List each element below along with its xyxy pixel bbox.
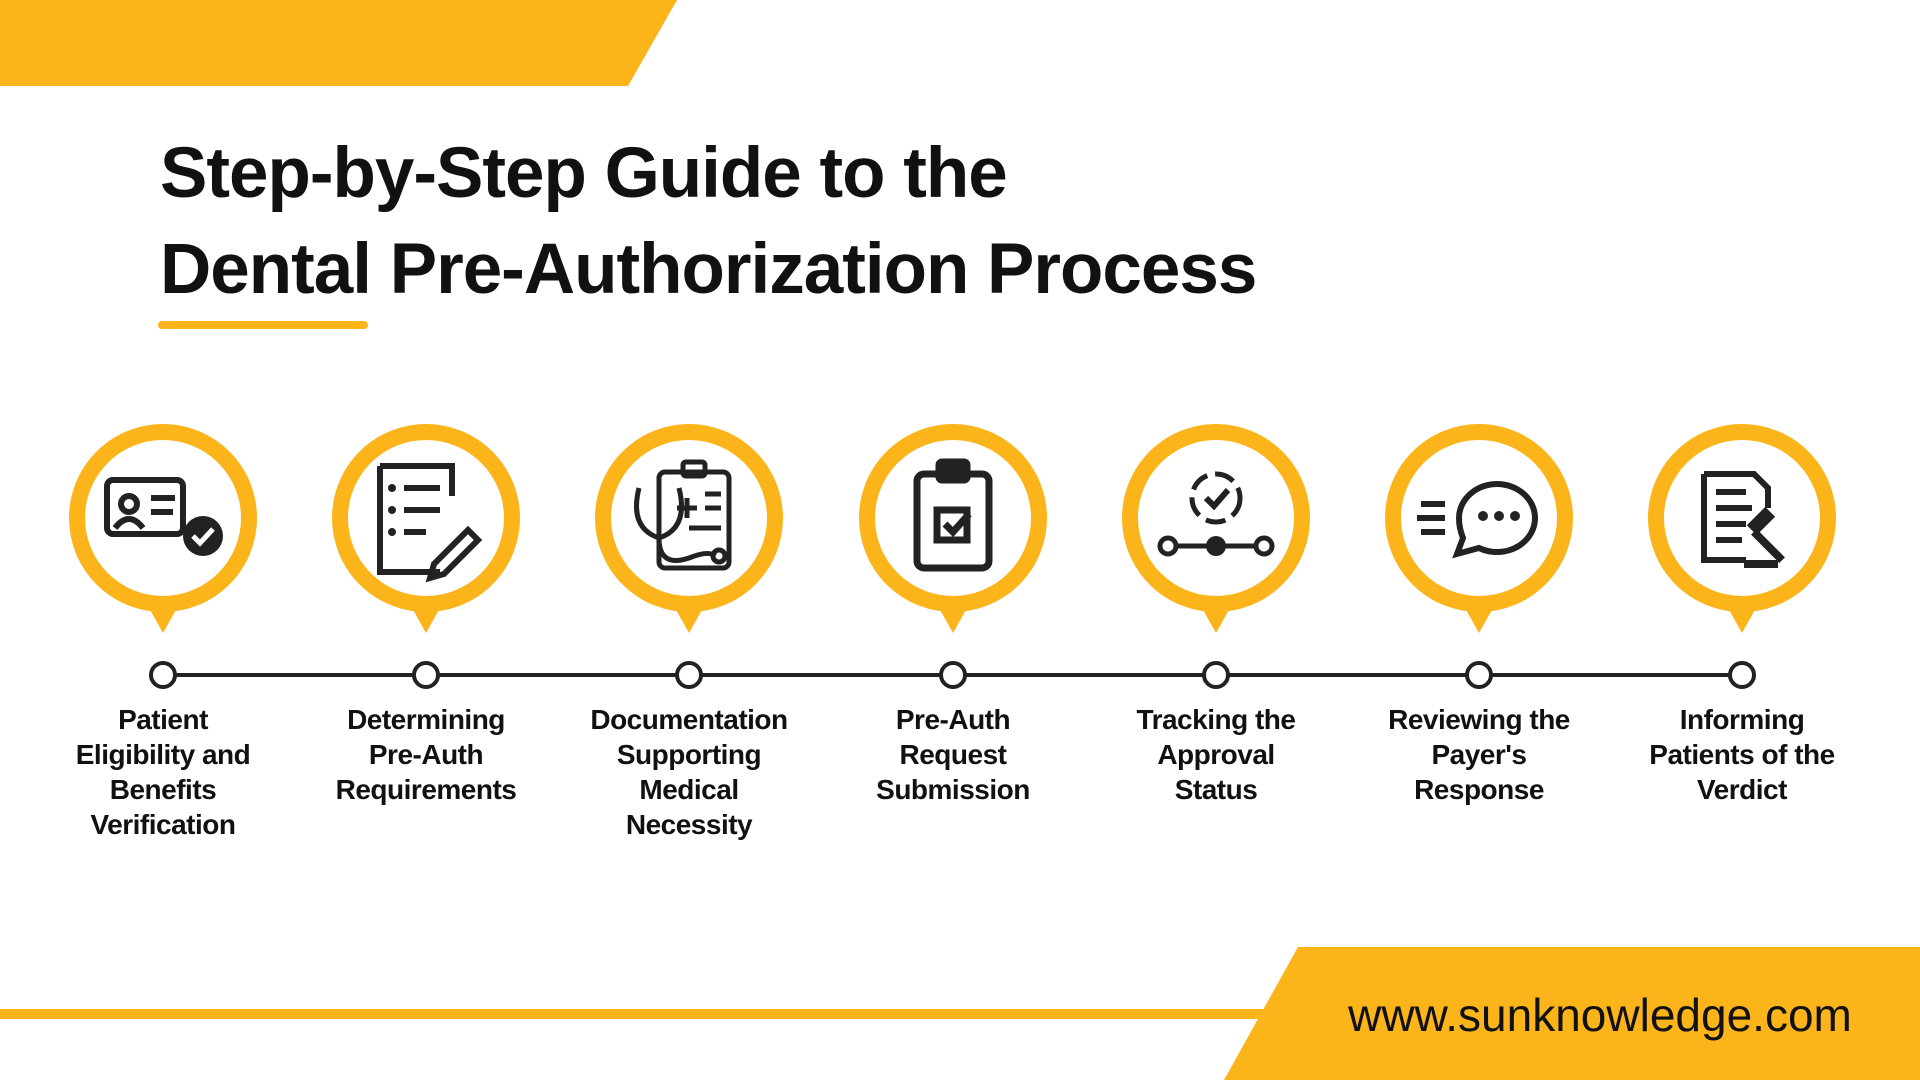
label: step 2: Determining [347,704,505,735]
label: step 3: Medical [639,774,739,805]
icon: medical clipboard with stethoscope [603,432,775,633]
top banner [0,0,677,86]
title underline [158,321,368,329]
icon: tracking status [1130,432,1302,633]
label: step 3 [590,704,788,840]
label: step 7 [1649,704,1835,805]
label: step 5: Status [1175,774,1257,805]
label: step 1: Eligibility and [76,739,250,770]
label: step 6 [1388,704,1570,805]
icon: ID card [77,432,249,633]
label: step 7: Patients of the [1649,739,1835,770]
label: step 1: Patient [118,704,208,735]
label: step 6: Reviewing the [1388,704,1570,735]
label: step 5: Tracking the [1137,704,1295,735]
label: step 6: Response [1414,774,1544,805]
label: step 3: Documentation [590,704,788,735]
label: step 5 [1136,704,1295,805]
label: step 4: Pre-Auth [896,704,1010,735]
icon: checklist with pencil [340,432,512,633]
icon: document with gavel [1656,432,1828,633]
label: step 5: Approval [1157,739,1275,770]
label: step 4: Request [900,739,1006,770]
bottom banner with website: www.sunknowledge.com [1348,989,1852,1041]
icon: clipboard check [867,432,1039,633]
label: step 3: Supporting [617,739,761,770]
title: Dental Pre-Authorization Process [160,230,1256,309]
label: step 1: Benefits [110,774,216,805]
label: step 3: Necessity [626,809,752,840]
label: step 4: Submission [876,774,1030,805]
label: step 4 [876,704,1030,805]
label: step 7: Verdict [1697,774,1787,805]
label: step 2: Pre-Auth [369,739,483,770]
label: step 1 [76,704,250,840]
label: step 2 [336,704,516,805]
title [160,134,1256,309]
title: Step-by-Step Guide to the [160,134,1007,213]
bottom stripe [0,1009,1270,1019]
icon: speech bubble [1393,432,1565,633]
label: step 2: Requirements [336,774,516,805]
label: step 6: Payer's [1431,739,1527,770]
label: step 7: Informing [1680,704,1804,735]
label: step 1: Verification [91,809,235,840]
